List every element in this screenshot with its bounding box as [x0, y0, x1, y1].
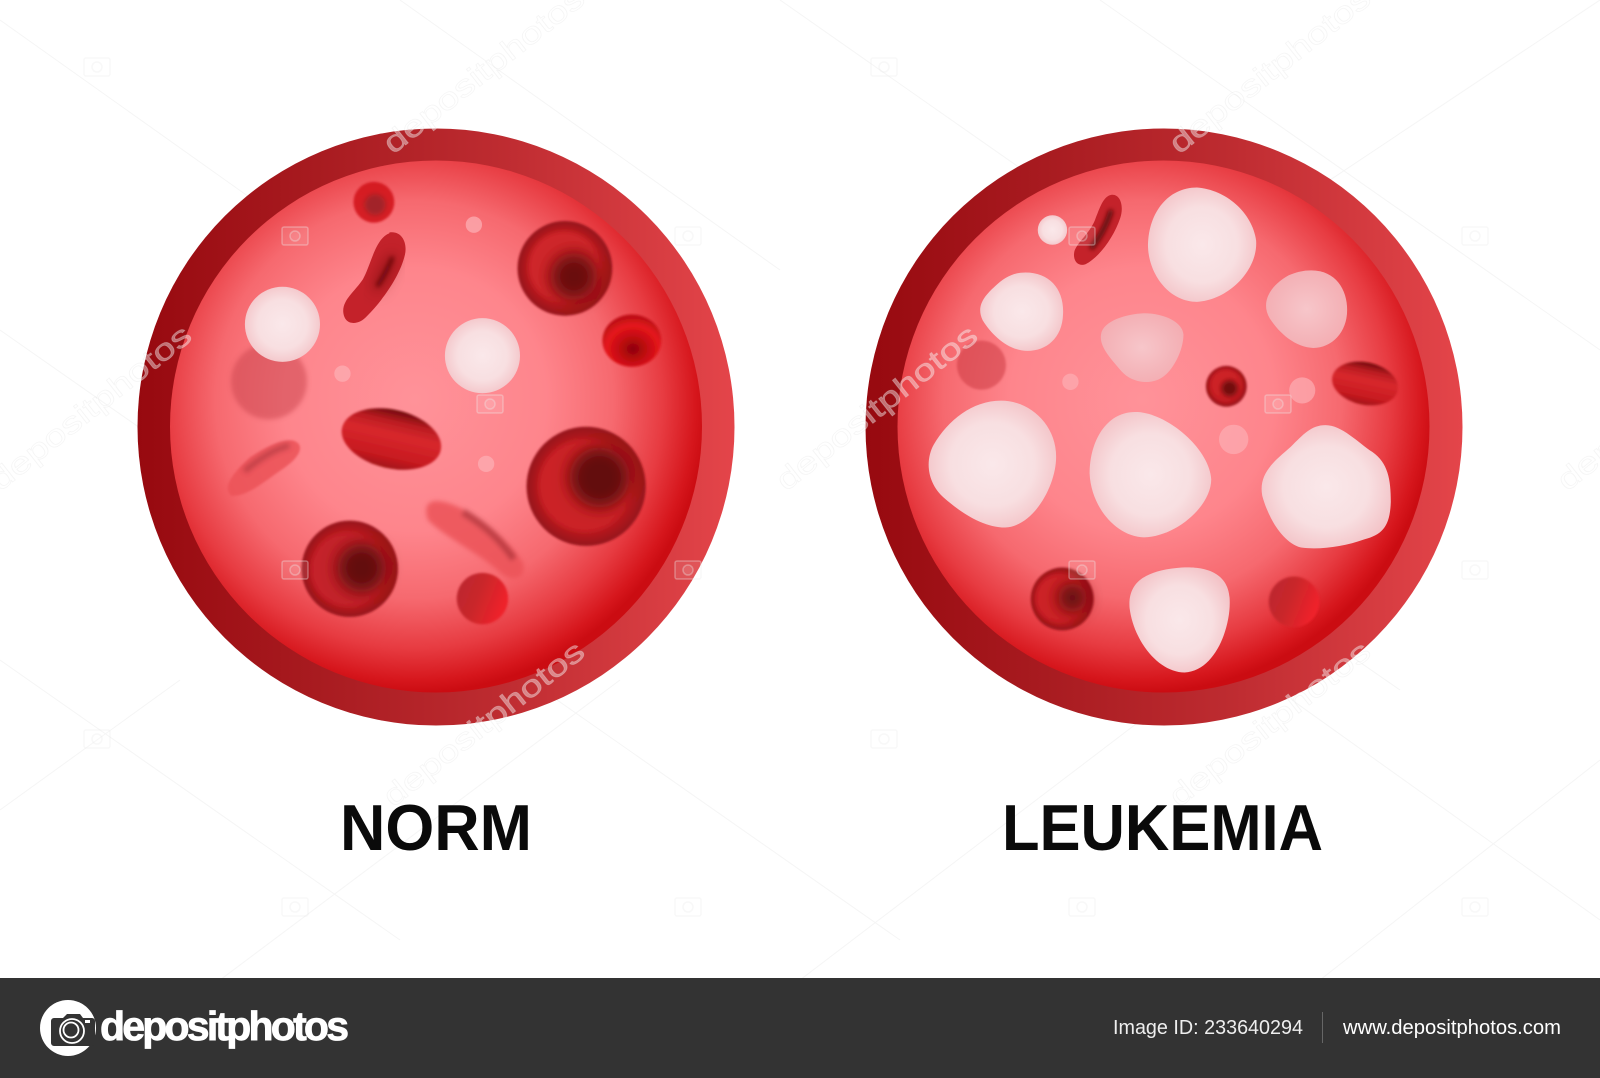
sickle cell	[1074, 195, 1122, 265]
leukemic blast right	[1262, 425, 1391, 548]
panel: leukemia blood sample	[866, 128, 1462, 726]
leukemic blast bottom	[1129, 567, 1230, 672]
panel: norm blood sample	[138, 128, 734, 726]
icon: camera logo	[40, 1000, 96, 1056]
plasma dots	[1062, 374, 1315, 454]
white cell center	[445, 318, 520, 393]
bright small cell right	[602, 314, 661, 367]
watermark camera marks	[84, 58, 1488, 916]
leukemia plasma	[898, 160, 1430, 692]
leukemia cells	[929, 188, 1402, 672]
watermark text: depositphotos	[377, 0, 591, 160]
soft red cell bottom right	[1269, 577, 1319, 627]
leukemic blast upper left	[980, 272, 1063, 351]
footer bar	[0, 978, 1600, 1078]
large red cell	[527, 427, 646, 546]
heading: norm: NORM	[340, 791, 532, 864]
norm vessel ring	[138, 128, 734, 726]
norm plasma	[170, 160, 702, 692]
small soft cell bottom	[457, 573, 508, 624]
oval red cell	[1328, 356, 1402, 411]
watermark text: depositphotos	[377, 635, 591, 813]
small cell top	[353, 182, 394, 223]
blurred background cell	[957, 341, 1006, 390]
logo wordmark: depositphotos	[100, 1003, 349, 1049]
watermark text: depositphotos	[770, 319, 984, 497]
blurred background cell	[231, 343, 307, 419]
red cell top right	[518, 221, 612, 316]
sickle cell	[343, 232, 406, 323]
red cell bottom left	[1031, 568, 1094, 630]
norm cells	[228, 182, 661, 624]
image id: Image ID: 233640294	[1113, 1017, 1303, 1039]
heading: leukemia: LEUKEMIA	[1002, 791, 1323, 864]
oval red cell	[336, 399, 447, 479]
pale blast upper right	[1266, 270, 1347, 348]
leukemic blast big left	[929, 401, 1056, 528]
plasma dots	[334, 217, 494, 472]
small dark red cell	[1206, 366, 1247, 407]
blurred sickle right	[426, 501, 524, 579]
blurred sickle left	[228, 440, 300, 496]
leukemia vessel ring	[866, 128, 1462, 726]
pale blast middle	[1101, 313, 1183, 382]
website url: www.depositphotos.com	[1342, 1017, 1561, 1039]
watermark text: depositphotos	[1163, 635, 1377, 813]
leukemic blast top	[1148, 188, 1256, 302]
small white cell	[1038, 215, 1067, 245]
red cell bottom	[302, 521, 398, 617]
watermark text	[0, 0, 1600, 813]
watermark text: depositphotos	[1163, 0, 1377, 160]
white cell left	[245, 287, 320, 362]
leukemic blast center	[1090, 412, 1211, 537]
